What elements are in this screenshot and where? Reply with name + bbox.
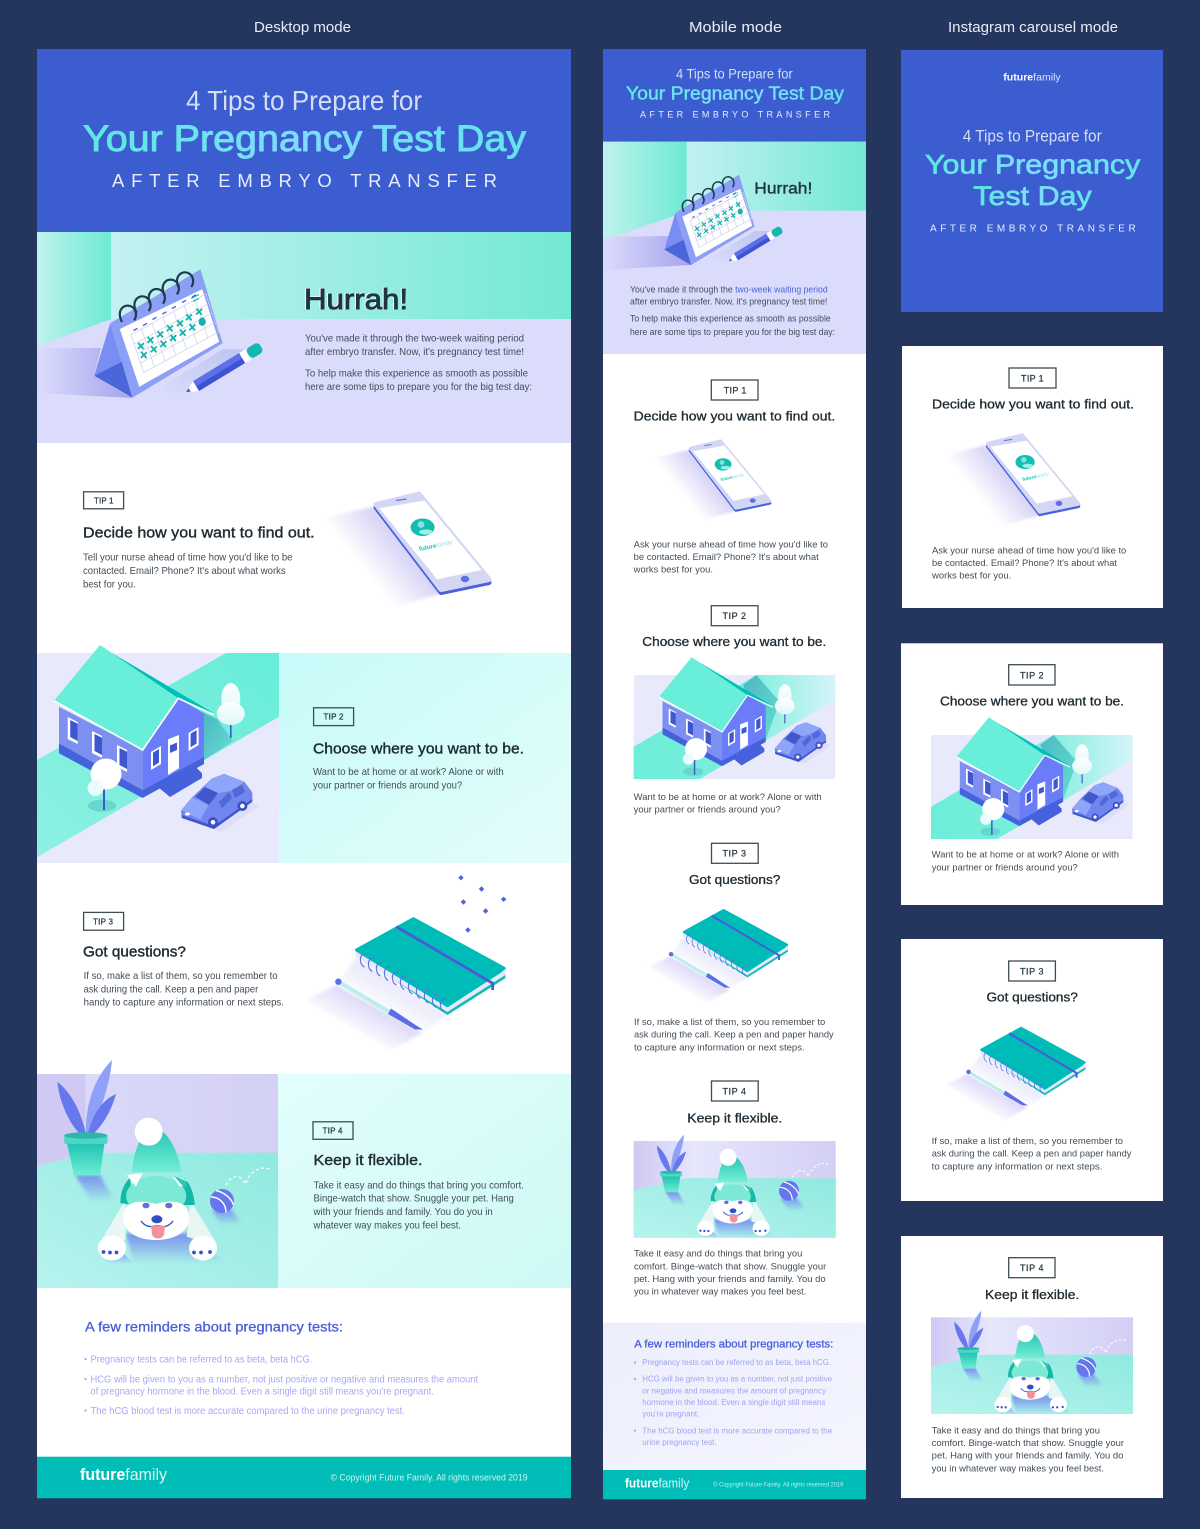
panel: Instagram tip 2: TIP 2 [1020, 670, 1044, 680]
mobile tip 4: TIP 4 [722, 1086, 746, 1096]
panel: Instagram tip 1 [902, 346, 1163, 608]
header: mobile title: Your Pregnancy Test Day [626, 82, 845, 103]
icon: calendar and pencil [664, 175, 784, 265]
mobile reminders: or negative and measures the amount of pregnancy [642, 1386, 826, 1395]
decoration: falling diamonds [458, 875, 506, 933]
text: intro paragraphs: here are some tips to prepare you for the big test day: [305, 382, 532, 393]
mobile tip 2 [634, 606, 835, 815]
badge: tip 2: TIP 2 [324, 713, 344, 722]
reminders: The hCG blood test is more accurate compared to the urine pregnancy test. [90, 1406, 405, 1417]
text: tip 2 body [313, 767, 504, 791]
panel: Hurrah intro [37, 232, 571, 443]
label: mobile mode: Mobile mode [689, 20, 782, 36]
badge: tip 4 [313, 1122, 353, 1139]
badge: tip 3 [84, 912, 124, 930]
panel: mobile infographic [603, 49, 866, 1499]
panel: Instagram tip 1: Ask your nurse ahead of time how you'd like to [932, 545, 1126, 555]
mobile tip 3: If so, make a list of them, so you remember to [634, 1017, 825, 1027]
heading: Hurrah: Hurrah! [754, 180, 812, 197]
badge: tip 4: TIP 4 [322, 1126, 343, 1136]
mobile reminders: The hCG blood test is more accurate compared to the [642, 1426, 833, 1435]
text: intro paragraphs [305, 334, 532, 393]
header: desktop title: 4 Tips to Prepare for [186, 85, 422, 116]
mobile tip 1: be contacted. Email? Phone? It's about what [634, 552, 819, 562]
text: mobile intro: You've made it through the two-week waiting period [630, 284, 828, 294]
panel: Instagram tip 3: Got questions? [986, 990, 1078, 1005]
panel: Instagram tip 1: Decide how you want to find out. [932, 397, 1134, 412]
mobile tip 4: comfort. Binge-watch that show. Snuggle your [634, 1261, 826, 1271]
text: tip 2 body: your partner or friends around you? [313, 780, 463, 791]
panel: Instagram tip 4: Take it easy and do things that bring you [932, 1425, 1100, 1435]
panel: Instagram cover: Test Day [973, 181, 1092, 211]
tip 4 section [37, 1060, 571, 1288]
footer: futurefamily [80, 1465, 167, 1484]
mobile reminders: hormone in the blood. Even a single digit still means [642, 1398, 825, 1407]
header: mobile title: AFTER EMBRYO TRANSFER [640, 109, 830, 119]
heading: Hurrah: Hurrah! [304, 284, 408, 316]
panel: Instagram cover: Your Pregnancy [925, 149, 1141, 179]
text: mobile intro: To help make this experience as smooth as possible [630, 314, 831, 324]
mobile tip 3: to capture any information or next steps. [634, 1042, 805, 1052]
panel: Instagram tip 3 [901, 939, 1163, 1201]
label: Instagram carousel mode: Instagram carousel mode [948, 20, 1118, 36]
mobile tip 3: ask during the call. Keep a pen and paper handy [634, 1030, 834, 1040]
mobile tip 1: Ask your nurse ahead of time how you'd like to [634, 539, 828, 549]
mobile reminders [603, 1323, 866, 1470]
header: mobile title [603, 49, 866, 142]
heading: tip 4: Keep it flexible. [314, 1152, 422, 1169]
reminders: Pregnancy tests can be referred to as beta, beta hCG. [90, 1355, 312, 1366]
mobile tip 1 [633, 380, 835, 575]
panel: Instagram tip 3: If so, make a list of them, so you remember to [932, 1136, 1123, 1146]
text: tip 4 body: whatever way makes you feel best. [313, 1220, 461, 1231]
text: tip 1 body [83, 553, 293, 590]
illustration: dog scene [37, 1060, 278, 1288]
mobile tip 3: TIP 3 [722, 849, 746, 859]
text: intro paragraphs: To help make this experience as smooth as possible [305, 369, 528, 380]
mobile tip 2: Choose where you want to be. [642, 634, 826, 649]
panel: Instagram tip 1: TIP 1 [1021, 373, 1044, 383]
text: tip 1 body: Tell your nurse ahead of time how you'd like to be [83, 553, 293, 564]
mobile reminders: you're pregnant. [642, 1410, 699, 1419]
reminders: A few reminders about pregnancy tests: [85, 1320, 343, 1335]
text: tip 1 body: best for you. [83, 579, 136, 590]
panel: Instagram tip 4: you in whatever way makes you feel best. [932, 1463, 1104, 1473]
icon: phone [323, 494, 489, 607]
mobile tip 4: pet. Hang with your friends and family. You do [634, 1274, 826, 1284]
text: mobile intro: after embryo transfer. Now, it's pregnancy test time! [630, 296, 827, 306]
badge: tip 2 [314, 708, 354, 726]
icon: calendar and pencil [94, 269, 264, 398]
text: tip 4 body [313, 1180, 524, 1231]
header: desktop title: AFTER EMBRYO TRANSFER [112, 170, 497, 191]
mobile tip 3 [634, 843, 834, 1052]
tip 1 section [83, 492, 489, 607]
mobile reminders: A few reminders about pregnancy tests: [634, 1339, 833, 1351]
mobile tip 1: TIP 1 [724, 385, 746, 395]
label: desktop mode: Desktop mode [254, 20, 351, 36]
mobile reminders: HCG will be given to you as a number, not just positive [642, 1375, 833, 1384]
badge: tip 1 [84, 492, 124, 509]
panel: Instagram tip 4 [901, 1236, 1163, 1498]
panel: Instagram tip 1: works best for you. [931, 571, 1011, 581]
mobile footer [603, 1470, 866, 1499]
text: mobile intro [630, 284, 835, 337]
mobile footer: © Copyright Future Family. All rights reserved 2019 [713, 1482, 844, 1489]
panel: desktop infographic [37, 49, 571, 1498]
panel: Instagram tip 3: to capture any information or next steps. [932, 1161, 1102, 1171]
panel: Instagram tip 2 [901, 643, 1163, 905]
reminders: HCG will be given to you as a number, not just positive or negative and measures the amount [90, 1375, 478, 1386]
mobile tip 4: Take it easy and do things that bring you [634, 1249, 802, 1259]
mobile footer: futurefamily [625, 1477, 690, 1491]
panel: Instagram tip 2: your partner or friends around you? [932, 863, 1078, 873]
heading: Hurrah: Hurrah! [303, 284, 407, 316]
header: desktop title [37, 49, 571, 232]
badge: tip 3: TIP 3 [93, 918, 114, 926]
panel: Instagram tip 4: pet. Hang with your friends and family. You do [932, 1451, 1123, 1461]
text: tip 3 body: If so, make a list of them, so you remember to [84, 971, 278, 982]
mobile tip 1: Decide how you want to find out. [634, 409, 835, 424]
text: tip 3 body [84, 971, 284, 1009]
mobile tip 2: Want to be at home or at work? Alone or with [634, 792, 822, 802]
text: tip 4 body: Take it easy and do things that bring you comfort. [314, 1180, 524, 1191]
mobile tip 4 [634, 1081, 836, 1297]
panel: Instagram tip 3: TIP 3 [1020, 966, 1044, 976]
heading: tip 1: Decide how you want to find out. [83, 524, 315, 541]
mobile tip 2: TIP 2 [722, 611, 746, 621]
illustration: house scene [37, 645, 279, 863]
text: tip 4 body: Binge-watch that show. Snuggle your pet. Hang [314, 1194, 514, 1205]
header: desktop title: Your Pregnancy Test Day [83, 118, 527, 159]
panel: tip 2 text background [279, 653, 571, 863]
panel: tip 4 text background [278, 1074, 571, 1288]
text: tip 3 body: handy to capture any information or next steps. [84, 998, 284, 1009]
panel: Instagram cover: AFTER EMBRYO TRANSFER [930, 224, 1136, 235]
mobile tip 4: Keep it flexible. [687, 1111, 782, 1126]
text: intro paragraphs: You've made it through the two-week waiting period [305, 334, 524, 345]
footer [37, 1457, 571, 1498]
mobile tip 3: Got questions? [689, 872, 780, 887]
tip 3 section [83, 875, 506, 1050]
text: tip 2 body: Want to be at home or at work? Alone or with [313, 767, 504, 778]
heading: tip 2: Choose where you want to be. [313, 740, 524, 757]
panel: Instagram tip 2: Want to be at home or at work? Alone or with [932, 850, 1119, 860]
panel: Instagram tip 4: Keep it flexible. [985, 1287, 1079, 1302]
panel: mobile Hurrah intro [603, 142, 866, 354]
header: mobile title: 4 Tips to Prepare for [676, 65, 793, 81]
mobile reminders: urine pregnancy test. [642, 1438, 717, 1447]
panel: Instagram cover: 4 Tips to Prepare for [963, 128, 1102, 146]
panel: Instagram tip 1: be contacted. Email? Phone? It's about what [932, 558, 1117, 568]
panel: Instagram tip 3: ask during the call. Keep a pen and paper handy [932, 1149, 1132, 1159]
panel: Instagram tip 2: Choose where you want to be. [940, 694, 1124, 709]
text: tip 4 body: with your friends and family. You do you in [313, 1207, 493, 1218]
reminders: of pregnancy hormone in the blood. Even a single digit still means you're pregnant. [90, 1386, 434, 1397]
icon: notebook and pen [306, 919, 505, 1050]
reminders [84, 1320, 478, 1417]
text: tip 1 body: contacted. Email? Phone? It's about what works [83, 566, 286, 577]
mobile tip 1: works best for you. [633, 565, 713, 575]
footer: © Copyright Future Family. All rights reserved 2019 [331, 1473, 528, 1484]
panel: Instagram tip 4: TIP 4 [1020, 1263, 1044, 1273]
panel: Instagram tip 4: comfort. Binge-watch that show. Snuggle your [932, 1438, 1124, 1448]
text: tip 3 body: ask during the call. Keep a pen and paper [84, 984, 259, 995]
heading: tip 3: Got questions? [83, 944, 186, 961]
text: intro paragraphs: after embryo transfer. Now, it's pregnancy test time! [305, 347, 524, 358]
mobile tip 2: your partner or friends around you? [634, 805, 781, 815]
text: mobile intro: here are some tips to prepare you for the big test day: [630, 327, 835, 337]
panel: Instagram cover [901, 50, 1163, 312]
badge: tip 1: TIP 1 [94, 496, 114, 505]
mobile reminders: Pregnancy tests can be referred to as beta, beta hCG. [642, 1358, 831, 1367]
panel: Instagram cover: futurefamily [1003, 72, 1061, 84]
mobile tip 4: you in whatever way makes you feel best. [634, 1287, 806, 1297]
tip 2 section [37, 645, 571, 863]
